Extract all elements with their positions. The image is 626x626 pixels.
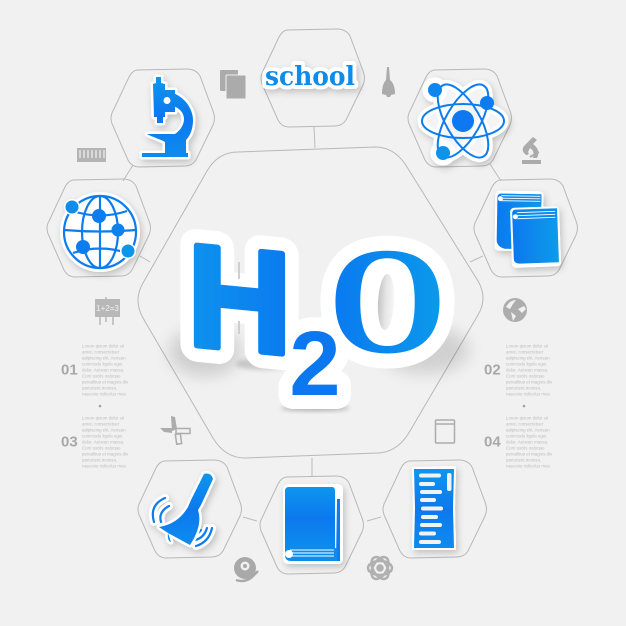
icon: school sticker: school [265, 62, 355, 92]
icon: grey earth globe [503, 298, 527, 322]
text block 04: Cum sociis natoque [506, 446, 545, 450]
title: H2O sticker: H [187, 213, 292, 385]
text block 04: parturient montes, [506, 458, 541, 462]
title: H2O sticker: O [328, 217, 447, 386]
icon: globe with nodes sticker [60, 192, 140, 272]
icon: grey keyboard [77, 148, 106, 162]
icon: grey closed book [436, 420, 454, 443]
text block 02: commodo ligula eget [506, 362, 547, 366]
text block 03: adipiscing elit. Aenean [82, 428, 126, 432]
central hexagon outline [138, 147, 483, 458]
icon: atom sticker [422, 77, 504, 165]
panel: hand bell hexagon [138, 460, 242, 558]
text block 04: penatibus et magnis dis [506, 452, 553, 456]
text block 02: nascetur ridiculus mus. [506, 392, 551, 396]
title: H2O sticker [169, 213, 469, 415]
text block 02: amet, consectetuer [506, 350, 544, 354]
text block 01: commodo ligula eget [82, 362, 123, 366]
icon: grey bell [382, 67, 395, 97]
text block 03: Lorem ipsum dolor sit [82, 416, 125, 420]
text block 01: amet, consectetuer [82, 350, 120, 354]
text block 02: parturient montes, [506, 386, 541, 390]
panel: microscope hexagon [111, 69, 214, 167]
text block 03: Cum sociis natoque [82, 446, 121, 450]
text block 02: Cum sociis natoque [506, 374, 545, 378]
title: H2O sticker: O [328, 217, 447, 386]
icon: two books sticker [494, 191, 561, 268]
icon: grey presentation board: 1+2=3 [96, 304, 119, 313]
text block 02: adipiscing elit. Aenean [506, 356, 550, 360]
icon: grey presentation board [95, 297, 120, 325]
icon: grey alarm bell [234, 557, 258, 581]
title: H2O sticker: H [187, 213, 292, 385]
panel: school hexagon [261, 29, 364, 127]
panel: book hexagon [260, 476, 364, 574]
text block 04 [484, 416, 553, 468]
icon: grey cards [220, 70, 246, 99]
text block 01: Cum sociis natoque [82, 374, 121, 378]
text block 01: dolor. Aenean massa. [82, 368, 124, 372]
text block 02 [484, 344, 553, 396]
title: H2O sticker: 2 [289, 313, 341, 415]
text block 01: 01 [61, 362, 78, 378]
icon: hand bell sticker [153, 474, 213, 546]
text block 02: penatibus et magnis dis [506, 380, 553, 384]
text block 03: commodo ligula eget [82, 434, 123, 438]
icon: grey scissors [160, 416, 190, 444]
icon: microscope sticker [142, 77, 193, 157]
text block 03 [61, 416, 129, 468]
text block 01: adipiscing elit. Aenean [82, 356, 126, 360]
text block 04: Lorem ipsum dolor sit [506, 416, 549, 420]
text block 04: 04 [484, 434, 501, 450]
connector lines [123, 127, 501, 521]
text block 01: penatibus et magnis dis [82, 380, 129, 384]
text block 04: amet, consectetuer [506, 422, 544, 426]
text block 02: dolor. Aenean massa. [506, 368, 548, 372]
text block 04: nascetur ridiculus mus. [506, 464, 551, 468]
text block 03: dolor. Aenean massa. [82, 440, 124, 444]
panel: globe hexagon [47, 179, 150, 277]
text block 03: parturient montes, [82, 458, 117, 462]
panel: list hexagon [383, 460, 486, 558]
text block 01: nascetur ridiculus mus. [82, 392, 127, 396]
icon: grey microscope [522, 137, 541, 164]
panel: books hexagon [474, 179, 578, 277]
text block 03: nascetur ridiculus mus. [82, 464, 127, 468]
icon: grey atom [368, 554, 392, 582]
title: H2O sticker: 2 [289, 313, 341, 415]
text block 04: commodo ligula eget [506, 434, 547, 438]
text block 04: adipiscing elit. Aenean [506, 428, 550, 432]
text block 01: parturient montes, [82, 386, 117, 390]
panel: atom hexagon [408, 69, 512, 167]
icon: school sticker: school [265, 62, 355, 92]
text block 03: 03 [61, 434, 78, 450]
text block 01: Lorem ipsum dolor sit [82, 344, 125, 348]
text block 01 [61, 344, 129, 396]
separator dots [99, 405, 525, 407]
text block 02: Lorem ipsum dolor sit [506, 344, 549, 348]
text block 02: 02 [484, 362, 501, 378]
text block 03: penatibus et magnis dis [82, 452, 129, 456]
icon: list document sticker [412, 466, 456, 550]
text block 03: amet, consectetuer [82, 422, 120, 426]
text block 04: dolor. Aenean massa. [506, 440, 548, 444]
icon: book sticker [283, 484, 343, 564]
